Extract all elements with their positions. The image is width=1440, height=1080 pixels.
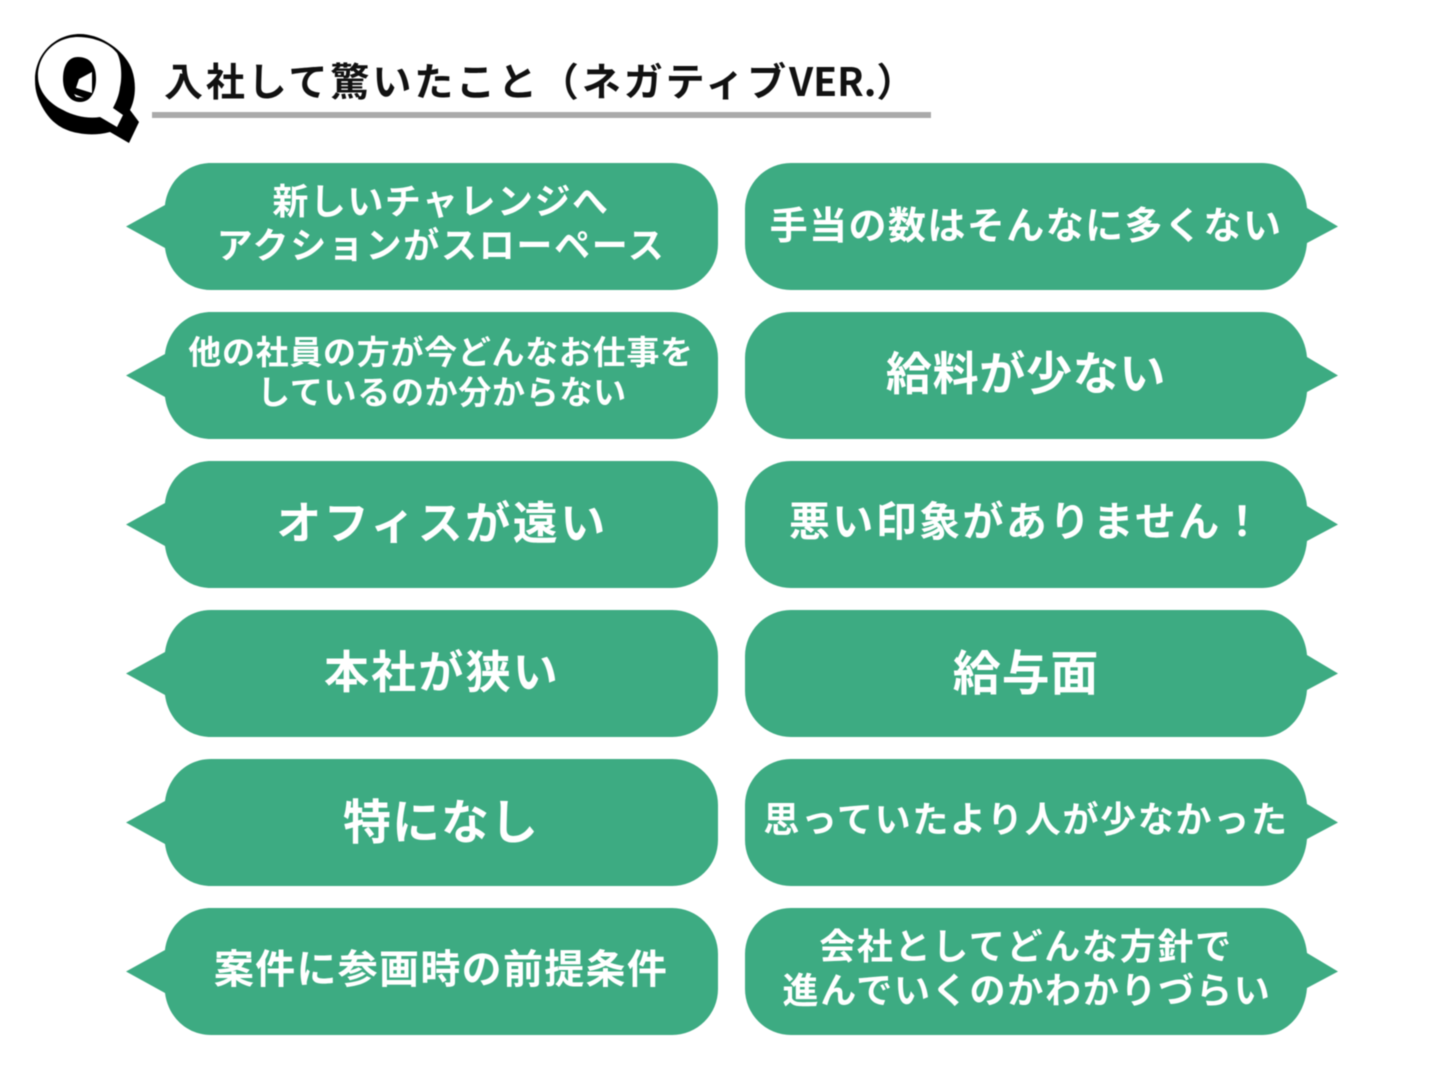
bubble: left 4: 本社が狭い bbox=[324, 647, 560, 698]
bubble: right 4: 給与面 bbox=[953, 648, 1099, 701]
bubble: right 3: 悪い印象がありません！ bbox=[789, 499, 1265, 545]
bubble: right 3 bbox=[745, 461, 1338, 588]
icon: Q speech mark bbox=[35, 34, 139, 143]
bubble: right 6 bbox=[745, 908, 1338, 1035]
bubble: left 1 bbox=[126, 163, 718, 290]
bubble: left 6: 案件に参画時の前提条件 bbox=[214, 948, 668, 992]
bubble: left 2 bbox=[126, 312, 718, 439]
bubble: left 3 bbox=[126, 461, 718, 588]
bubble: left 1: 新しいチャレンジへ bbox=[272, 181, 610, 222]
bubble: right 1: 手当の数はそんなに多くない bbox=[770, 206, 1282, 248]
bubble: right 5 bbox=[745, 759, 1338, 886]
bubble: right 2 bbox=[745, 312, 1338, 439]
bubble: left 2: 他の社員の方が今どんなお仕事を bbox=[188, 334, 694, 371]
bubble: left 1: アクションがスローペース bbox=[217, 225, 665, 266]
bubble: left 3: オフィスが遠い bbox=[276, 498, 608, 549]
bubble: left 5: 特になし bbox=[343, 797, 539, 850]
bubble: left 6 bbox=[126, 908, 718, 1035]
bubble: right 6: 進んでいくのかわかりづらい bbox=[783, 970, 1271, 1011]
bubble: left 5 bbox=[126, 759, 718, 886]
bubble: right 1 bbox=[745, 163, 1338, 290]
bubble: right 6: 会社としてどんな方針で bbox=[819, 926, 1233, 967]
title: 入社して驚いたこと（ネガティブVER.） bbox=[164, 52, 918, 108]
title underline bbox=[152, 112, 931, 118]
bubble: left 4 bbox=[126, 610, 718, 737]
bubble: right 5: 思っていたより人が少なかった bbox=[763, 799, 1289, 840]
bubble: left 2: しているのか分からない bbox=[257, 374, 627, 411]
bubble: right 4 bbox=[745, 610, 1338, 737]
bubble: right 2: 給料が少ない bbox=[886, 348, 1166, 400]
